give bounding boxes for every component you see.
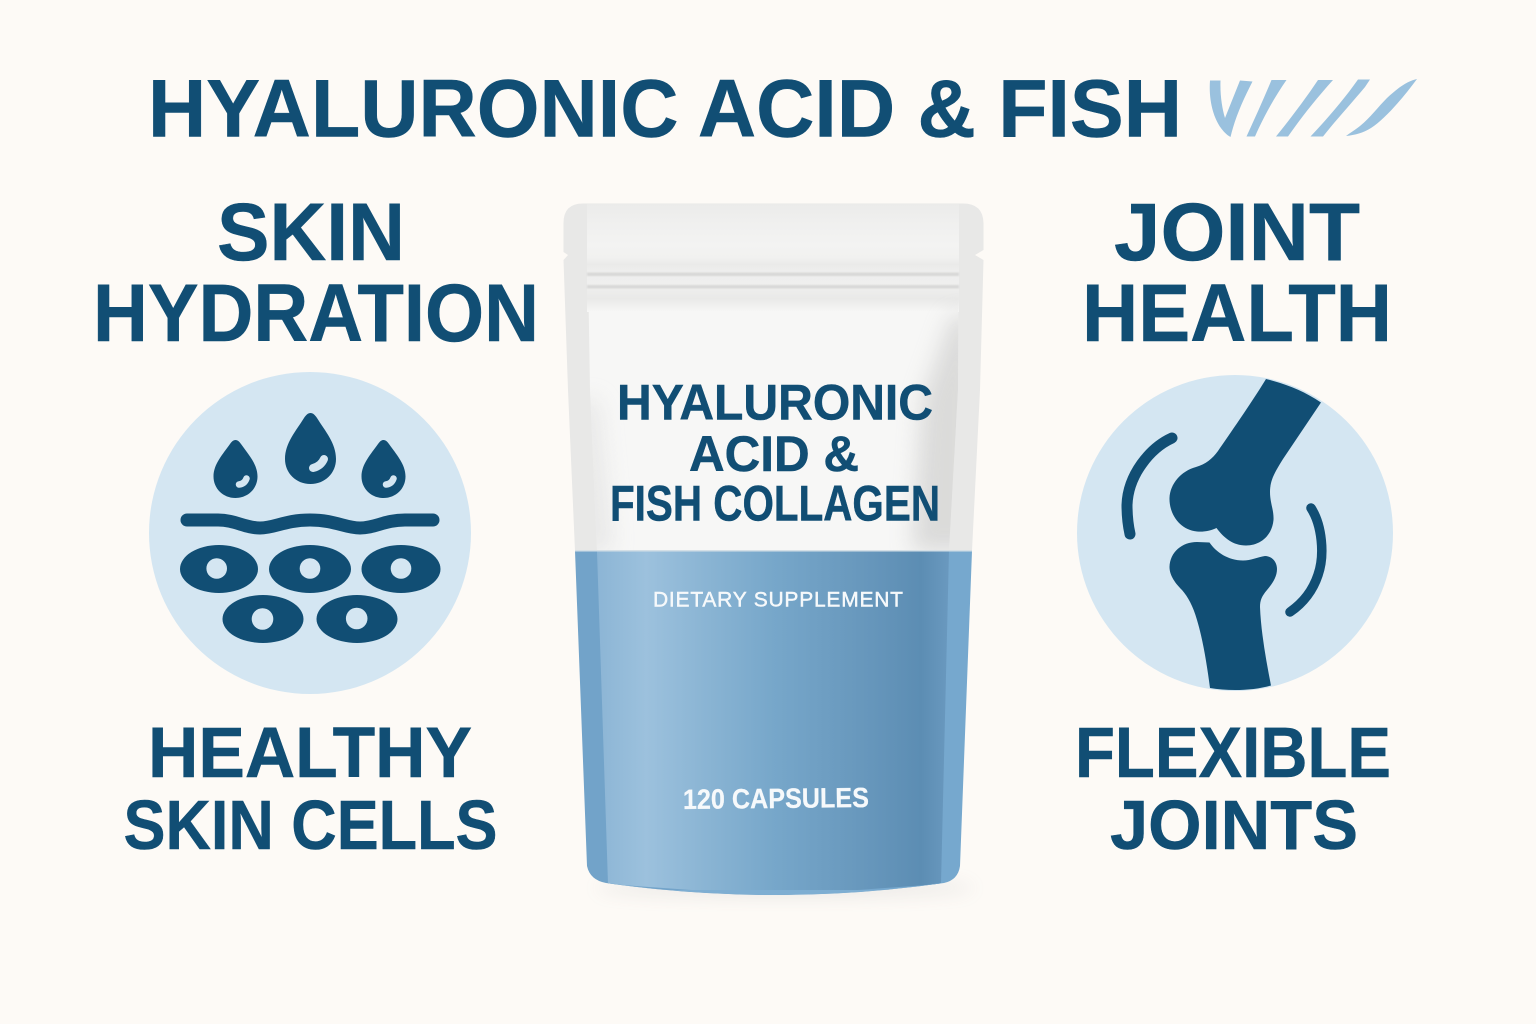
pouch title: FISH COLLAGEN xyxy=(610,476,940,532)
pouch label: dietary supplement: DIETARY SUPPLEMENT xyxy=(653,588,903,612)
skin surface line xyxy=(187,520,433,528)
heading: skin hydration: SKIN xyxy=(217,187,405,278)
icon: skin hydration circle xyxy=(149,372,471,694)
pouch title: HYALURONIC xyxy=(617,374,933,430)
icon: decorative blue slashes xyxy=(1210,79,1417,137)
title: HYALURONIC ACID & FISH xyxy=(148,64,1182,154)
heading: skin hydration xyxy=(93,187,539,359)
product pouch xyxy=(555,200,995,901)
heading: healthy skin cells: HEALTHY xyxy=(148,714,472,793)
heading: healthy skin cells: SKIN CELLS xyxy=(124,786,498,864)
pouch title xyxy=(610,374,940,532)
pouch body xyxy=(555,200,995,901)
heading: joint health: HEALTH xyxy=(1082,268,1392,359)
heading: joint health xyxy=(1082,187,1392,359)
motion arc right xyxy=(1290,508,1322,612)
cell nuclei xyxy=(206,558,411,630)
skin cells xyxy=(180,545,440,643)
icon: joint circle xyxy=(1077,375,1393,691)
heading: skin hydration: HYDRATION xyxy=(93,268,539,359)
icon: water drops xyxy=(214,413,406,498)
femur xyxy=(1169,379,1321,546)
heading: healthy skin cells xyxy=(124,714,498,864)
heading: flexible joints xyxy=(1075,714,1391,864)
pouch title: ACID & xyxy=(689,426,859,482)
heading: joint health: JOINT xyxy=(1114,187,1360,278)
heading: flexible joints: JOINTS xyxy=(1110,786,1358,864)
heading: flexible joints: FLEXIBLE xyxy=(1075,714,1391,793)
pouch shadow xyxy=(595,879,975,897)
pouch label: capsules: 120 CAPSULES xyxy=(683,782,869,815)
tibia xyxy=(1170,542,1277,690)
motion arc left xyxy=(1127,438,1172,534)
